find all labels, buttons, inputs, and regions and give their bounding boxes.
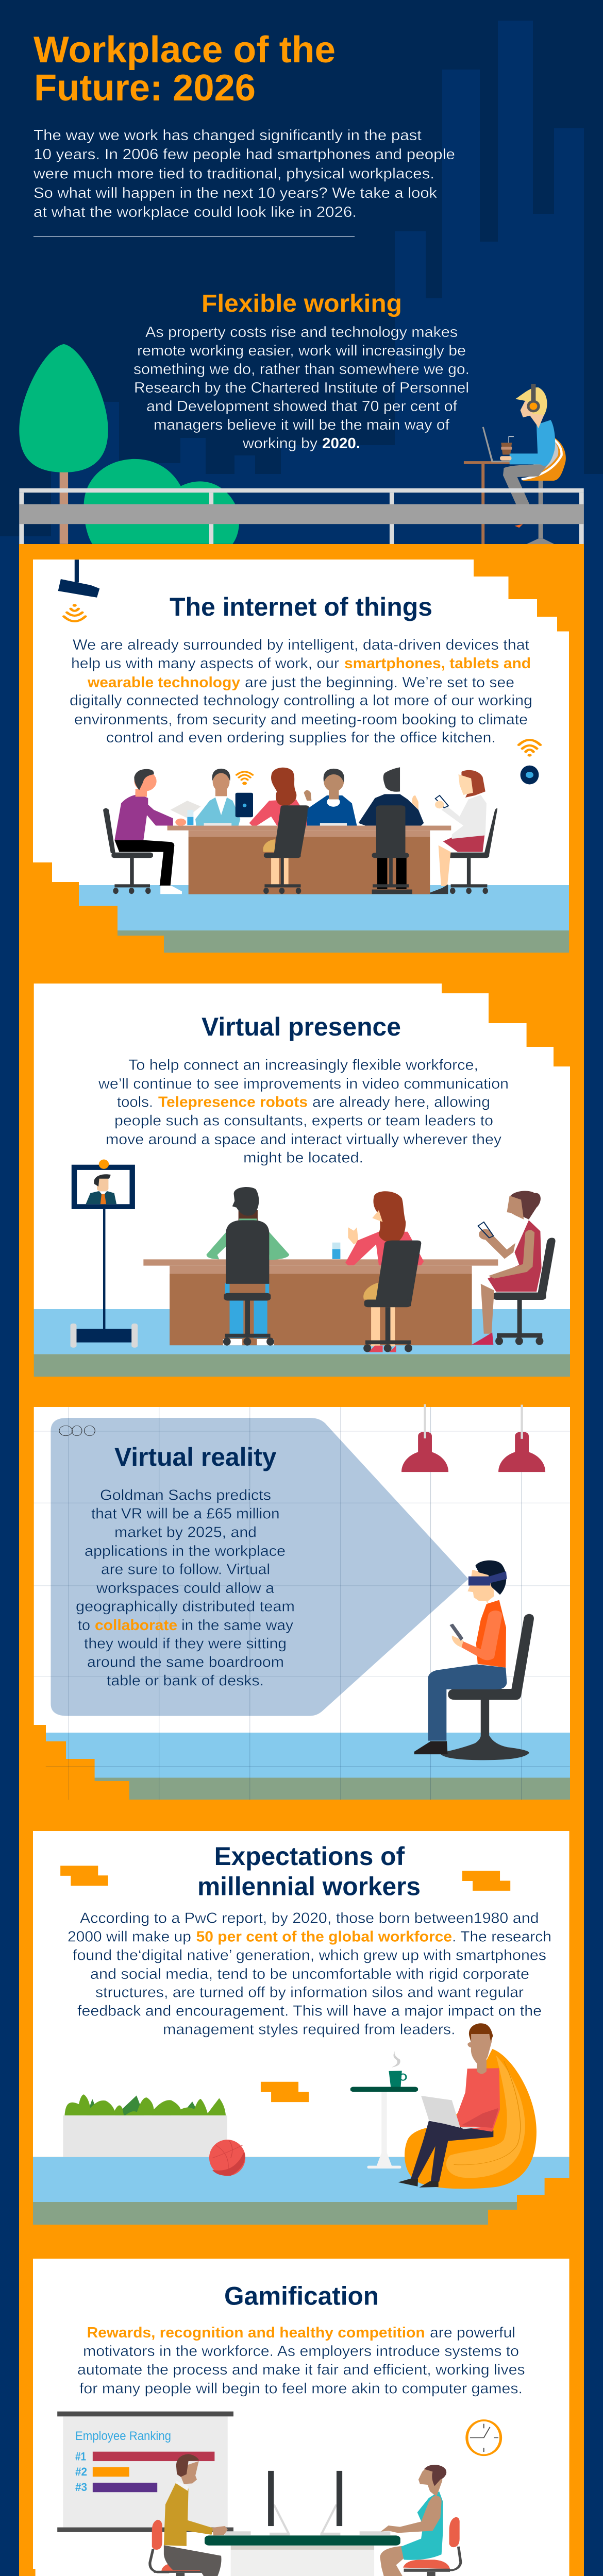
monitors and keyboards (225, 2471, 390, 2535)
planter with hedge (63, 2094, 227, 2157)
meeting table (167, 826, 451, 894)
illustration: ranking board: #2 (75, 2465, 87, 2478)
railing (19, 488, 584, 548)
heading: Virtual presence (202, 1012, 401, 1041)
body text: tools. (117, 1094, 153, 1111)
panel shape: wall and floor (33, 560, 569, 953)
hero illustration: tree, bush, remote worker, railing (19, 344, 584, 548)
bean bag (405, 2049, 537, 2189)
body text: Telepresence robots (158, 1094, 308, 1111)
body text: that VR will be a £65 million (91, 1505, 279, 1522)
body text: around the same boardroom (87, 1654, 284, 1671)
heading: millennial workers (197, 1872, 421, 1901)
body text: help us with many aspects of work, our (71, 655, 339, 672)
body text (77, 2325, 525, 2397)
chair (440, 1614, 534, 1760)
body text: smartphones, tablets and (344, 655, 531, 672)
title (34, 29, 336, 109)
text: flexible working: working by (242, 435, 318, 452)
body text: automate the process and make it fair and efficient, working lives (77, 2362, 525, 2378)
heading: The internet of things (170, 592, 432, 621)
window dots (59, 1426, 95, 1436)
intro text: at what the workplace could look like in 2026. (34, 204, 357, 221)
intro text: 10 years. In 2006 few people had smartphones and people (34, 146, 455, 163)
person: man in green, back view (207, 1187, 289, 1346)
heading: Expectations of (214, 1842, 405, 1871)
desk (205, 2535, 400, 2576)
panel: virtual reality (34, 1404, 570, 1800)
text: flexible working: As property costs rise and technology makes (145, 324, 458, 341)
person: man in blue sweater (304, 769, 357, 826)
intro text: So what will happen in the next 10 years? We take a look (34, 185, 438, 201)
speech bubble: virtual view (51, 1418, 468, 1716)
bush (84, 459, 239, 544)
icon: small wifi (237, 772, 253, 784)
heading: Gamification (224, 2281, 379, 2310)
body text: to (78, 1617, 90, 1634)
body text (98, 1057, 509, 1166)
heading: flexible working: Flexible working (202, 290, 402, 317)
body text: control and even ordering supplies for the office kitchen. (106, 730, 496, 746)
title: Workplace of the (34, 29, 336, 71)
panel: the internet of things (33, 560, 569, 953)
body text: move around a space and interact virtually wherever they (106, 1131, 502, 1148)
illustration: ranking board: #1 (75, 2450, 86, 2463)
body text: feedback and encouragement. This will have a major impact on the (77, 2003, 542, 2020)
body text: wearable technology (87, 674, 240, 691)
body text: digitally connected technology controlling a lot more of our working (70, 692, 532, 709)
body text: for many people will begin to feel more akin to computer games. (79, 2380, 523, 2397)
body text: they would if they were sitting (84, 1635, 287, 1652)
glass of water (187, 810, 193, 825)
panel shape: wall and floor (33, 1831, 569, 2225)
panel: expectations of millennial workers (33, 1831, 569, 2225)
body text: structures, are turned off by information silos and want regular (95, 1985, 524, 2001)
illustration: breakout space (60, 1866, 537, 2189)
person: man in mustard sweater (146, 2454, 228, 2576)
title: Future: 2026 (34, 67, 256, 109)
illustration: ranking board: #3 (75, 2481, 87, 2494)
intro text: were much more tied to traditional, physical workplaces. (33, 166, 434, 182)
body text: table or bank of desks. (107, 1672, 264, 1689)
body text: According to a PwC report, by 2020, those born between1980 and (80, 1910, 539, 1927)
illustration: ranking board (57, 2412, 233, 2532)
divider (34, 236, 355, 237)
person: woman with phone (430, 770, 497, 894)
text: flexible working: and Development showed that 70 per cent of (146, 398, 458, 415)
body text: people such as consultants, experts or team leaders to (114, 1113, 493, 1129)
panel shape: wall and floor (34, 1407, 570, 1800)
illustration: meeting room (58, 560, 540, 894)
panel shape: wall and floor (34, 984, 570, 1377)
orange background panel (19, 544, 584, 2576)
text: flexible working: Research by the Chartered Institute of Personnel (134, 380, 469, 396)
icon: security camera (58, 560, 99, 598)
icon: wifi inverted (64, 604, 86, 621)
intro text (33, 127, 455, 221)
body text: Goldman Sachs predicts (100, 1487, 271, 1504)
body text: might be located. (243, 1150, 363, 1166)
body text: in the same way (181, 1617, 294, 1634)
person: woman in red dress (472, 1191, 556, 1345)
decorative brick right (462, 1871, 510, 1891)
body text: environments, from security and meeting-room booking to climate (74, 711, 528, 728)
telepresence robot (71, 1160, 138, 1348)
intro text: The way we work has changed significantly in the past (34, 127, 422, 144)
body text: motivators in the workforce. As employers introduce systems to (83, 2343, 519, 2360)
body text: are just the beginning. We’re set to see (245, 674, 514, 691)
pendant lamp left (401, 1404, 448, 1472)
body text: geographically distributed team (76, 1599, 295, 1615)
body text: Rewards, recognition and healthy competition (87, 2325, 425, 2341)
remote worker at laptop (464, 384, 566, 546)
tree (19, 344, 108, 544)
icon: wifi (519, 740, 540, 756)
body text (68, 1910, 551, 2038)
body text: 2000 will make up (68, 1928, 191, 1945)
person: woman in pink (345, 1191, 424, 1352)
panel: virtual presence (34, 984, 570, 1377)
body text: . The research (452, 1928, 551, 1945)
illustration: telepresence meeting (71, 1160, 556, 1352)
text: flexible working: managers believe it will be the main way of (154, 417, 450, 433)
illustration: ranking board: Employee Ranking (75, 2429, 171, 2443)
icon: ceiling sensor (521, 766, 539, 784)
decorative brick centre (261, 2082, 309, 2102)
body text (70, 637, 532, 746)
wall clock (467, 2420, 501, 2455)
tablet (236, 793, 253, 817)
side table (350, 2087, 418, 2168)
body text: are already here, allowing (312, 1094, 490, 1111)
illustration: office desk scene (146, 2420, 501, 2576)
grid overlay (34, 1407, 570, 1800)
body text: are sure to follow. Virtual (101, 1562, 270, 1578)
illustration: virtual reality user (34, 1404, 570, 1800)
body text: market by 2025, and (114, 1524, 257, 1541)
person: man in navy, back view (358, 767, 424, 894)
body text: applications in the workplace (85, 1543, 286, 1560)
coffee cup (389, 2051, 406, 2087)
pendant lamp right (498, 1405, 545, 1472)
body text: management styles required from leaders. (163, 2022, 456, 2038)
text: flexible working: remote working easier, work will increasingly be (137, 343, 466, 359)
decorative brick left (60, 1866, 108, 1886)
body text (76, 1487, 295, 1689)
person wearing headset (414, 1561, 507, 1754)
person: man in purple (103, 769, 201, 894)
panel shape: wall and floor (33, 2259, 569, 2576)
text: flexible working: 2020. (322, 435, 360, 452)
person on bean bag (398, 2023, 500, 2188)
heading (197, 1842, 421, 1901)
body text: 50 per cent of the global workforce (196, 1928, 452, 1945)
body text: found the‘digital native’ generation, which grew up with smartphones (73, 1947, 546, 1964)
glass of water (332, 1243, 340, 1259)
person: woman in teal dress (379, 2465, 466, 2576)
heading: Virtual reality (114, 1443, 277, 1471)
meeting table (143, 1259, 498, 1345)
body text: and social media, tend to be uncomfortable with rigid corporate (90, 1966, 529, 1982)
body text: collaborate (95, 1617, 177, 1634)
body text: To help connect an increasingly flexible workforce, (128, 1057, 478, 1074)
basketball (209, 2140, 245, 2176)
person: man in teal jacket (195, 769, 240, 826)
body text: are powerful (430, 2325, 515, 2341)
body text: workspaces could allow a (96, 1580, 275, 1597)
body text: We are already surrounded by intelligent, data-driven devices that (73, 637, 529, 653)
text: flexible working (133, 324, 470, 452)
person: woman in pink, back view (249, 768, 311, 894)
panel: gamification (33, 2259, 569, 2576)
text: flexible working: something we do, rather than somewhere we go. (133, 361, 470, 378)
body text: we’ll continue to see improvements in video communication (98, 1076, 509, 1092)
